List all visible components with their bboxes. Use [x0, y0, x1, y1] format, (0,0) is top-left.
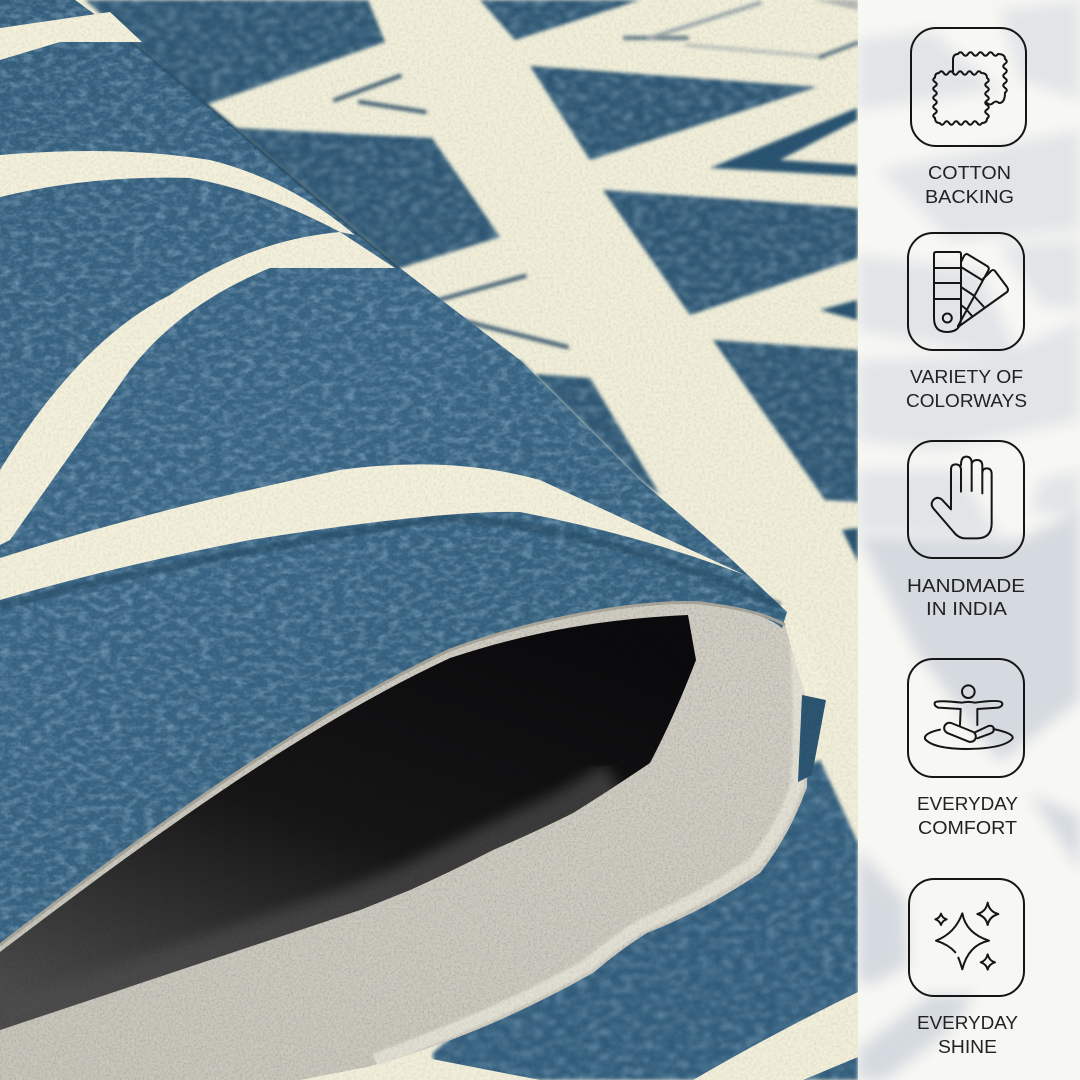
- icon: sparkles: [909, 879, 1024, 996]
- label: variety of colorways: COLORWAYS: [906, 390, 1027, 411]
- feature: cotton backing: [911, 28, 1026, 207]
- roll outer contour shadow: [130, 40, 400, 268]
- feature: handmade in india: [907, 441, 1025, 619]
- rolled edge seam: [0, 603, 785, 945]
- dark inner cavity: [0, 615, 696, 1030]
- label: everyday comfort: COMFORT: [918, 817, 1017, 838]
- dark lower lip of roll: [0, 518, 780, 606]
- icon: colour swatch fan: [908, 233, 1024, 350]
- backing pale hem: [375, 640, 799, 1060]
- underlying rug lower right: [433, 760, 858, 1080]
- icon: meditating figure: [908, 659, 1024, 777]
- flat rug dark slits: [335, 3, 857, 347]
- feature: variety of colorways: [906, 233, 1027, 411]
- rolled rug top: [0, 0, 787, 945]
- label: cotton backing: BACKING: [925, 186, 1014, 207]
- rug photograph: [0, 0, 858, 1080]
- fine texture: [0, 0, 858, 1080]
- flat rug yarn mottling: [88, 0, 858, 1080]
- rolled backing: [0, 603, 807, 1080]
- flat rug background pattern: [0, 0, 858, 1080]
- feature: everyday shine: [909, 879, 1024, 1057]
- label: everyday comfort: EVERYDAY: [917, 793, 1018, 814]
- top right grey corner: [813, 0, 858, 10]
- label: handmade in india: HANDMADE: [907, 575, 1025, 596]
- label: everyday shine: SHINE: [938, 1036, 997, 1057]
- cavity mesh band: [0, 790, 620, 1035]
- cream stripes on roll: [0, 12, 826, 700]
- icon: cotton swatches: [911, 28, 1026, 146]
- lower cream stripes: [430, 992, 858, 1080]
- label: handmade in india: IN INDIA: [926, 598, 1008, 619]
- feature: everyday comfort: [908, 659, 1024, 838]
- label: variety of colorways: VARIETY OF: [910, 366, 1023, 387]
- side panel background: [858, 0, 1080, 1080]
- backing weave dots: [0, 600, 858, 1080]
- label: everyday shine: EVERYDAY: [917, 1012, 1018, 1033]
- label: cotton backing: COTTON: [928, 162, 1011, 183]
- blue edge of rug lip: [798, 695, 826, 782]
- icon: hand: [908, 441, 1024, 558]
- roll yarn mottling: [0, 0, 787, 941]
- flat rug blue panels: [85, 0, 858, 562]
